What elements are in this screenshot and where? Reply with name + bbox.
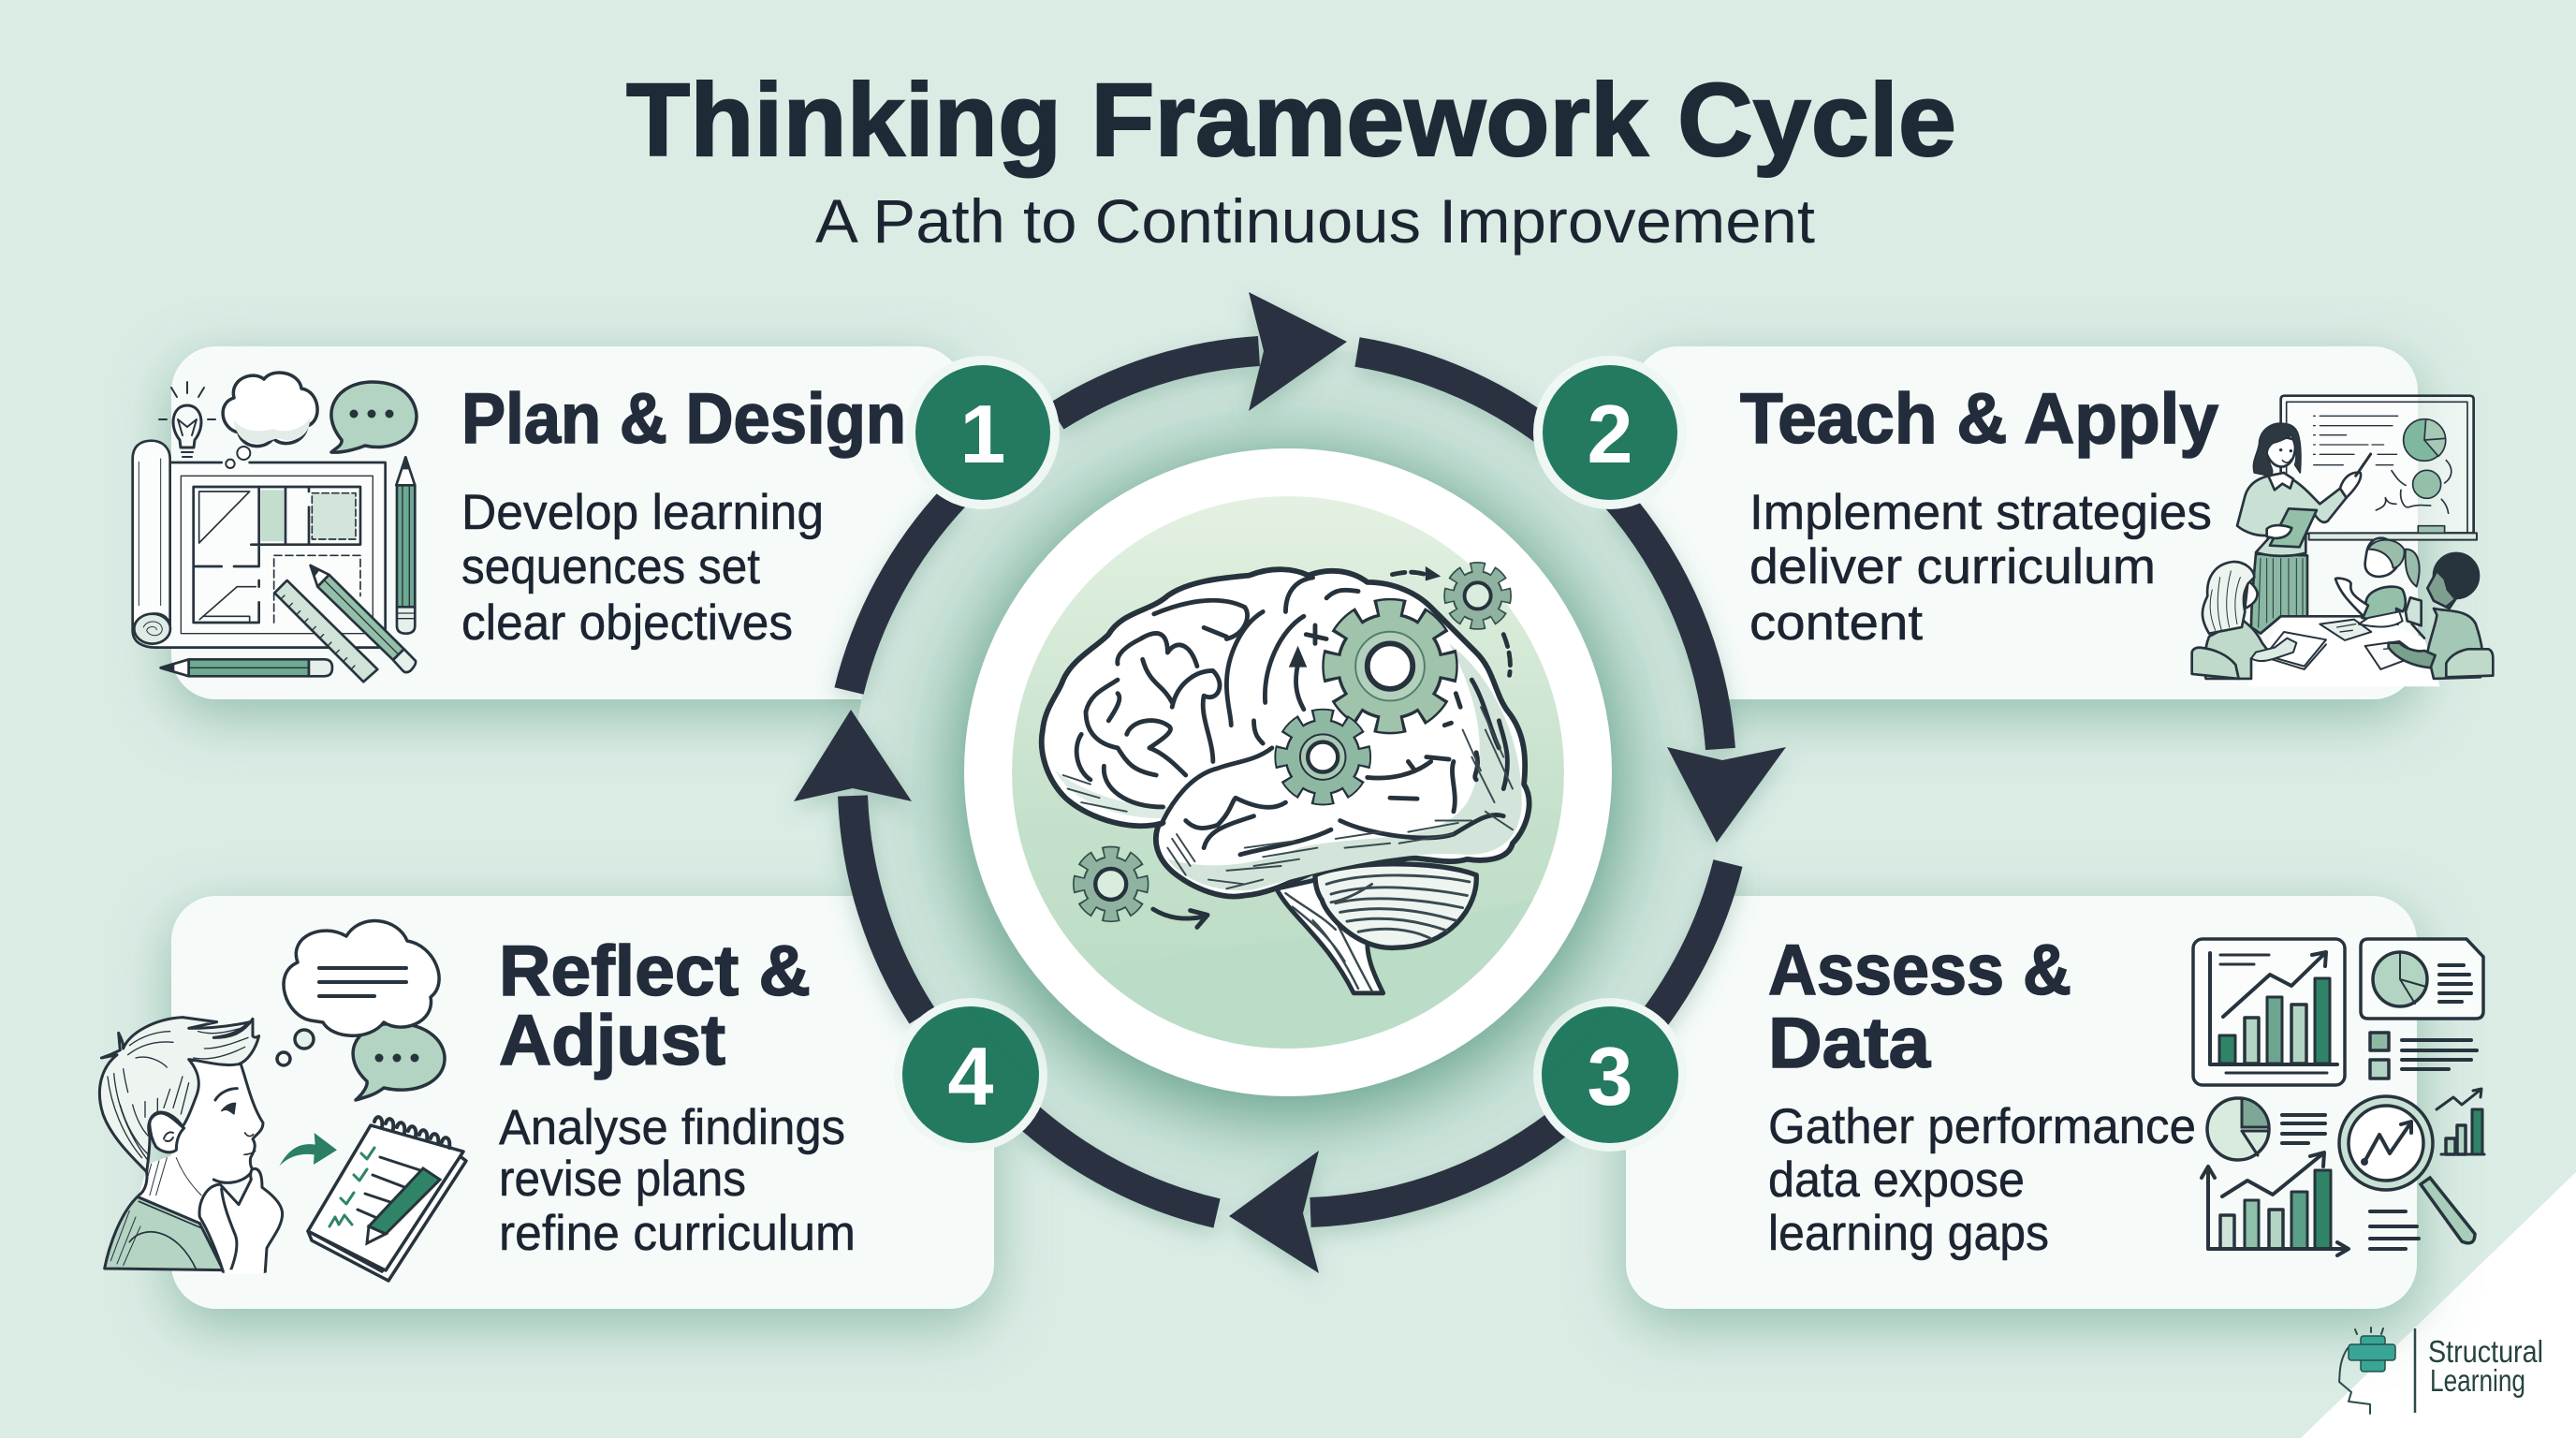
badge 3	[1533, 998, 1687, 1152]
panel: teach heading: Teach & Apply	[1740, 379, 2218, 459]
teach body text: Implement strategies	[1749, 485, 2212, 540]
mini bar chart	[2437, 1089, 2484, 1154]
student middle	[2335, 538, 2422, 627]
cerebrum	[1042, 569, 1530, 897]
text lines	[2370, 1211, 2419, 1249]
ring interior shading	[854, 347, 1722, 1216]
plan body text: sequences set	[461, 539, 760, 594]
speech bubble	[353, 1023, 445, 1100]
badge 2: 2	[1588, 388, 1632, 480]
thought cloud	[277, 921, 439, 1065]
legend list	[2370, 1033, 2477, 1078]
panel: reflect heading: Reflect &	[499, 932, 811, 1011]
badge 3: 3	[1588, 1030, 1632, 1123]
pencil: diagonal	[311, 565, 416, 672]
arrow	[279, 1133, 337, 1167]
plan body text: clear objectives	[461, 595, 793, 651]
white corner triangle	[2301, 1172, 2576, 1438]
magnifying glass	[2339, 1096, 2475, 1243]
badge 2	[1533, 356, 1687, 509]
thought cloud	[223, 373, 317, 447]
reflect body text: refine curriculum	[499, 1206, 856, 1261]
panel: assess heading: Data	[1768, 1004, 1931, 1083]
panel: assess card background	[1626, 896, 2417, 1309]
assess body text: learning gaps	[1768, 1206, 2049, 1261]
logo wordmark: Learning	[2430, 1363, 2525, 1398]
icon: reflecting student	[99, 921, 466, 1281]
gear: top right	[1451, 568, 1505, 624]
brain stem	[1277, 880, 1383, 993]
assess body text	[1768, 1099, 2196, 1261]
lightbulb	[159, 382, 215, 457]
teacher	[2237, 423, 2371, 634]
floor plan rooms	[194, 487, 360, 623]
icon: brain with gears	[1042, 566, 1530, 993]
student face	[148, 1063, 263, 1182]
student ear	[150, 1113, 184, 1152]
brain folds	[1076, 578, 1507, 855]
logo wordmark	[2428, 1334, 2543, 1398]
arrow tail: into badge 4	[1020, 1109, 1217, 1213]
pencil: right	[396, 457, 415, 634]
panel: teach card background	[1633, 346, 2418, 699]
logo divider	[2414, 1328, 2416, 1413]
central green medallion	[1012, 496, 1582, 1058]
panel: reflect heading: Adjust	[499, 1001, 725, 1080]
cerebellum	[1315, 864, 1476, 947]
brain shading	[1167, 643, 1522, 890]
panel: plan heading: Plan & Design	[461, 379, 906, 459]
icon: teacher and students	[2192, 396, 2493, 686]
assess body text: Gather performance	[1768, 1099, 2196, 1154]
pencil: bottom	[161, 659, 332, 676]
reflect body text: Analyse findings	[499, 1100, 845, 1155]
teach body text	[1749, 485, 2212, 651]
plan body text: Develop learning	[461, 485, 824, 540]
panel: reflect card background	[171, 896, 994, 1309]
gear: bottom left	[1080, 853, 1142, 915]
student left	[2192, 562, 2326, 679]
icon: blueprint and tools	[133, 373, 417, 682]
arrow: step 1 to 2	[1056, 292, 1347, 417]
gear: medium	[1282, 716, 1364, 798]
student figure	[99, 1018, 337, 1271]
student neck and body	[105, 1152, 223, 1270]
paper roll	[133, 441, 170, 648]
table and notebooks	[2247, 616, 2440, 686]
reflect body text	[499, 1100, 856, 1261]
arrow: step 4 to 1	[794, 710, 922, 1016]
student hand	[199, 1168, 283, 1271]
badge 1	[906, 356, 1060, 509]
document with pie	[2361, 939, 2483, 1019]
student facial features	[215, 1089, 256, 1154]
subtitle: A Path to Continuous Improvement	[815, 186, 1815, 256]
student right	[2389, 553, 2493, 679]
central white circle	[964, 448, 1612, 1096]
inner process arrow	[1289, 646, 1307, 710]
gear: large	[1333, 609, 1447, 723]
badge 4: 4	[948, 1030, 994, 1123]
whiteboard	[2281, 396, 2477, 540]
icon: data charts	[2193, 939, 2484, 1255]
blueprint with tools	[133, 441, 416, 682]
logo mark	[2339, 1328, 2395, 1414]
assess body text: data expose	[1768, 1152, 2025, 1208]
student hair	[99, 1018, 259, 1172]
bar chart framed	[2193, 939, 2345, 1085]
speech bubble	[331, 382, 417, 452]
arrow: step 2 to 3	[1615, 496, 1786, 843]
plan body text	[461, 485, 824, 651]
panel: assess heading: Assess &	[1768, 931, 2071, 1010]
notepad	[308, 1117, 466, 1281]
reflect body text: revise plans	[499, 1152, 746, 1207]
panel: reflect heading	[499, 932, 811, 1080]
arrow tail: into badge 3	[1638, 863, 1728, 1039]
logo	[2339, 1328, 2543, 1414]
teach body text: deliver curriculum	[1749, 539, 2156, 594]
title: Thinking Framework Cycle	[626, 63, 1956, 178]
panel: plan card background	[171, 346, 963, 699]
badge 1: 1	[960, 388, 1005, 480]
arrow tail: into badge 2	[1357, 352, 1563, 446]
logo wordmark: Structural	[2428, 1334, 2543, 1369]
cycle arrows	[794, 292, 1786, 1273]
pie chart	[2207, 1098, 2325, 1160]
process arrow bottom	[1153, 909, 1208, 927]
arrow tail: into badge 1	[849, 496, 955, 691]
dashed process arrow top	[1392, 566, 1510, 675]
teach body text: content	[1749, 595, 1923, 651]
badge 4	[894, 998, 1047, 1152]
arrow: step 3 to 4	[1229, 1112, 1573, 1273]
bar chart open	[2202, 1152, 2349, 1255]
blueprint sheet	[153, 462, 386, 648]
panel: assess heading	[1768, 931, 2071, 1083]
ruler	[274, 580, 377, 682]
